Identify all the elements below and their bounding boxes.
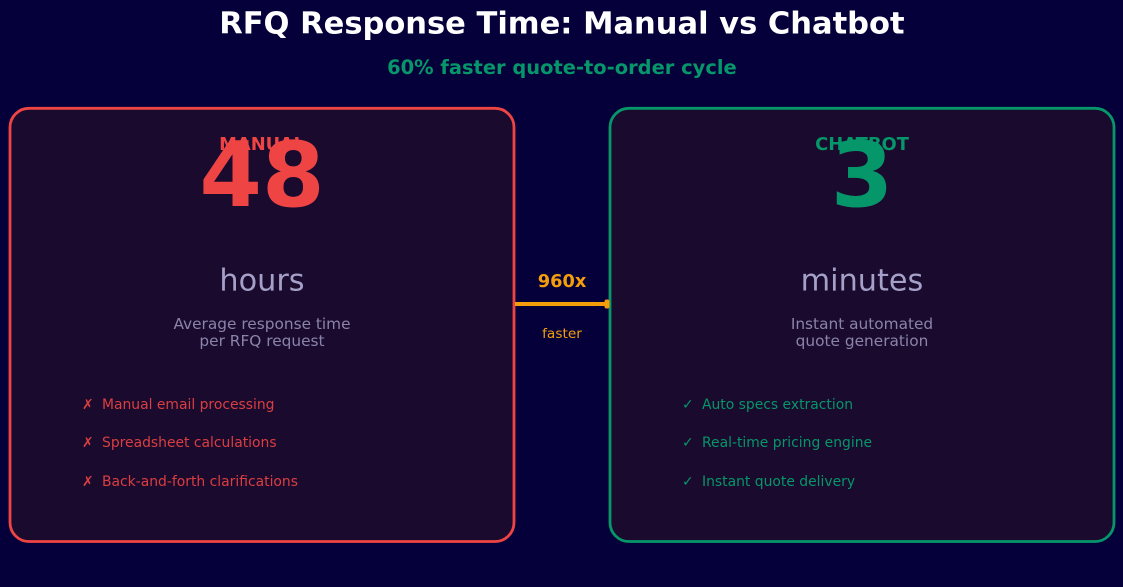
manual list: ✗ <box>82 397 94 413</box>
chatbot list: ✓ <box>682 435 694 451</box>
title: RFQ Response Time: Manual vs Chatbot <box>219 6 905 42</box>
chatbot unit: minutes <box>801 264 923 298</box>
manual list: Spreadsheet calculations <box>102 435 277 451</box>
manual list: ✗ <box>82 474 94 490</box>
manual unit: hours <box>219 264 305 298</box>
chatbot list: ✓ <box>682 397 694 413</box>
chatbot description: Instant automated <box>791 315 933 333</box>
chatbot list: Real-time pricing engine <box>702 435 872 451</box>
manual label: MANUAL <box>219 134 305 155</box>
chatbot list: ✓ <box>682 474 694 490</box>
subtitle: 60% faster quote-to-order cycle <box>387 56 737 79</box>
manual list <box>82 397 298 490</box>
manual description: Average response time <box>173 315 351 333</box>
panel: chatbot <box>610 108 1114 542</box>
chatbot list: Instant quote delivery <box>702 474 855 490</box>
arrow: speed comparison <box>515 271 610 342</box>
manual list: ✗ <box>82 435 94 451</box>
manual description: per RFQ request <box>199 332 325 350</box>
chatbot description: quote generation <box>796 332 928 350</box>
multiplier caption: faster <box>542 326 582 342</box>
chatbot label: CHATBOT <box>815 134 910 155</box>
multiplier: 960x <box>538 271 587 292</box>
chatbot list: Auto specs extraction <box>702 397 853 413</box>
manual list: Back-and-forth clarifications <box>102 474 298 490</box>
chatbot list <box>682 397 872 490</box>
panel: manual <box>10 108 514 542</box>
manual value: 48 <box>199 123 325 228</box>
manual list: Manual email processing <box>102 397 274 413</box>
chatbot value: 3 <box>831 123 893 228</box>
